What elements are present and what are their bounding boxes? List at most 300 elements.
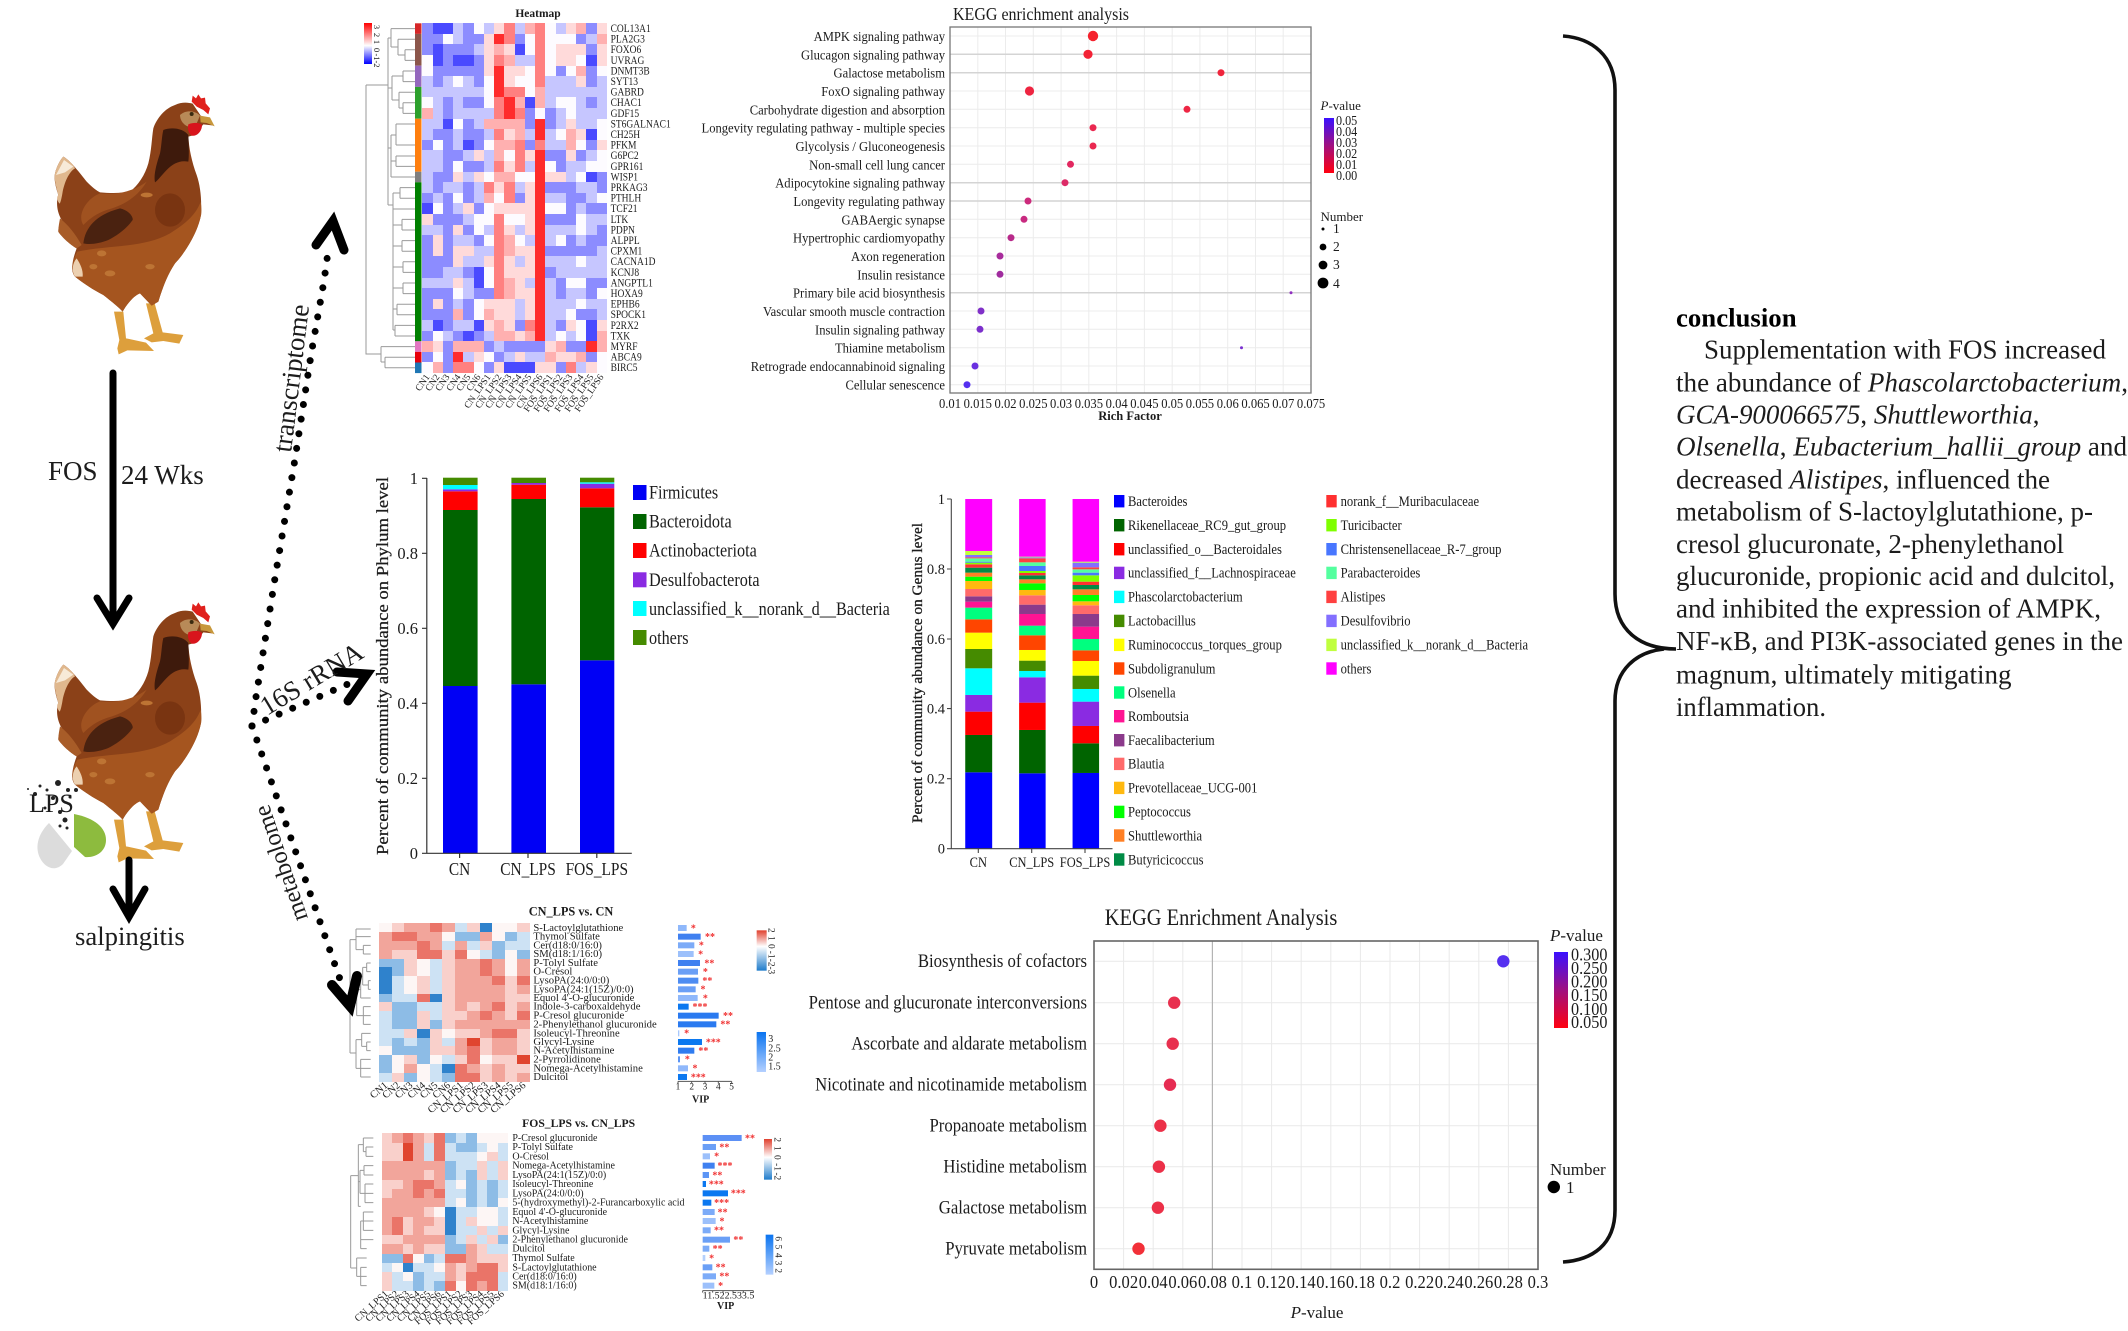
labels: sample names: CN_LPS1 (463, 373, 494, 411)
labels: gene names: ABCA9 (611, 352, 642, 364)
labels: sample names: FOS_LPS5 (563, 373, 597, 414)
labels: sample names: FOS_LPS1 (413, 1289, 454, 1328)
axis title: phylum abundance: Percent of community abundance on Phylum level (373, 477, 392, 855)
labels: metabolite names: Nomega-Acetylhistamine (512, 1161, 615, 1172)
legend: genera column one: unclassified_o__Bacteroidales (1128, 541, 1282, 557)
x axis labels (970, 854, 1110, 870)
x axis labels: CN (970, 854, 987, 870)
heading: KEGG enrichment analysis: KEGG enrichment analysis (953, 4, 1129, 24)
labels: significance stars: ** (714, 1226, 724, 1237)
heading: FOS_LPS vs. CN_LPS: FOS_LPS vs. CN_LPS (522, 1117, 635, 1130)
y axis tick labels: 0.2 (397, 769, 418, 788)
labels: significance stars: ** (702, 976, 712, 987)
labels: metabolite names: SM(d18:1/16:0) (533, 949, 602, 960)
labels: significance stars: * (684, 1029, 689, 1040)
x axis tick labels: 0.02 (995, 395, 1017, 411)
legend: genera column two: Christensenellaceae_R-7_group (1341, 541, 1502, 557)
axis: VIP scale: 11.522.533.5 (703, 1292, 755, 1302)
labels: gene names: GDF15 (611, 108, 639, 120)
chart: enrichment dots (964, 31, 1292, 388)
legend: expression colour scale (364, 23, 382, 68)
paragraph: conclusion body: metabolism of S-lactoylglutathione, p- (1676, 496, 2093, 526)
x axis labels: CN (449, 859, 470, 879)
labels: gene names: BIRC5 (611, 362, 638, 374)
x axis tick labels: 0.08 (1198, 1271, 1227, 1292)
x axis labels: FOS_LPS (566, 859, 628, 879)
legend: P-value colour scale: P-value (1549, 926, 1603, 945)
paragraph: conclusion body: and inhibited the expression of AMPK, (1676, 593, 2101, 623)
legend: phyla: Bacteroidota (649, 512, 732, 532)
labels: significance stars: * (691, 924, 696, 935)
labels: gene names: CH25H (611, 129, 640, 141)
paragraph: conclusion body: Supplementation with FOS increased (1704, 335, 2106, 365)
plot frame (1094, 941, 1538, 1269)
legend: gene number sizes: 1 (1333, 221, 1340, 236)
labels: gene names: SPOCK1 (611, 309, 646, 321)
labels: metabolite names: Isoleucyl-Threonine (512, 1179, 594, 1190)
legend: phyla: others (649, 628, 689, 648)
labels: significance stars: * (685, 1055, 690, 1066)
labels: gene names: CHAC1 (611, 97, 642, 109)
legend: number size: 1 (1566, 1178, 1574, 1197)
labels: significance stars: ** (745, 1134, 755, 1145)
legend: P-value colour scale: 0.05 (1336, 113, 1357, 128)
labels: metabolite names: 2-Phenylethanol glucuronide (533, 1020, 657, 1031)
legend: VIP colour scale: 2 (772, 1269, 782, 1274)
labels: metabolite names: Cer(d18:0/16:0) (512, 1272, 577, 1283)
labels: gene names: KCNJ8 (611, 267, 639, 279)
labels: gene names: LTK (611, 214, 629, 226)
x axis tick labels: 0.14 (1287, 1271, 1316, 1292)
axes (422, 478, 632, 858)
legend: genera column one: Peptococcus (1128, 804, 1191, 820)
labels: pathway names: Carbohydrate digestion and absorption (750, 102, 945, 117)
labels: significance stars: * (700, 985, 705, 996)
arrow: transcriptome branch (252, 221, 344, 726)
labels: sample names: CN_LPS1 (426, 1081, 466, 1116)
panel: KEGG Enrichment Analysis dot plot (metabolome) (809, 905, 1607, 1322)
labels: pathway names: Thiamine metabolism (835, 340, 946, 356)
labels: sample names: FOS_LPS5 (455, 1289, 496, 1328)
labels: significance stars: * (709, 1254, 714, 1265)
legend: P-value colour scale: 0.02 (1336, 146, 1357, 161)
legend: P-value colour scale: 0.200 (1571, 972, 1607, 992)
labels: pathway names: Glucagon signaling pathway (801, 47, 945, 62)
labels: metabolite names: S-Lactoylglutathione (512, 1263, 597, 1274)
legend: expression colour scale: 2 (372, 33, 382, 37)
labels: sample names: FOS_LPS2 (532, 373, 566, 414)
axis title: genus abundance: Percent of community abundance on Genus level (910, 523, 926, 823)
labels: gene names: GPR161 (611, 161, 643, 173)
legend: genera column one: Shuttleworthia (1128, 827, 1202, 844)
labels: metabolic pathway names: Galactose metabolism (939, 1197, 1087, 1218)
labels: metabolite names: Thymol Sulfate (533, 932, 600, 943)
label: LPS: LPS (29, 789, 74, 818)
legend: P-value colour scale: 0.01 (1336, 157, 1357, 172)
legend: number size (1548, 1160, 1606, 1197)
legend: VIP colour scale: 3 (772, 1261, 782, 1266)
labels: significance stars: ** (705, 932, 715, 943)
paragraph: conclusion body (1676, 335, 2128, 722)
x axis tick labels: 0.055 (1186, 395, 1214, 411)
labels: gene names: GABRD (611, 87, 644, 99)
labels: gene names: CACNA1D (611, 256, 656, 268)
plot frame and ticks (950, 27, 1311, 393)
labels: gene names: MYRF (611, 341, 638, 353)
labels: significance stars: ** (713, 1244, 723, 1255)
paragraph: conclusion body: GCA-900066575, Shuttleworthia, (1676, 400, 2040, 430)
labels: pathway names (702, 28, 946, 393)
labels: sample names: CN_LPS1 (353, 1289, 391, 1325)
x axis labels: CN_LPS (1009, 854, 1054, 870)
x axis tick labels: 0.3 (1528, 1271, 1549, 1292)
legend: phyla: Desulfobacterota (649, 570, 760, 590)
labels: metabolic pathway names: Pyruvate metabolism (945, 1238, 1087, 1259)
legend: P-value colour scale: 0.100 (1571, 999, 1607, 1019)
labels: sample names: FOS_LPS3 (542, 373, 576, 414)
legend: expression colour scale: -1 (372, 53, 382, 61)
paragraph: conclusion body: magnum, ultimately mitigating (1676, 660, 2012, 690)
labels: significance stars: *** (691, 1073, 706, 1084)
label: 16S rRNA: 16S rRNA (255, 636, 369, 721)
legend: genera column one: Blautia (1128, 756, 1164, 772)
axis: VIP scale (676, 1082, 734, 1106)
legend: P-value colour scale: 0.250 (1571, 958, 1607, 978)
legend: gene number sizes: 4 (1333, 276, 1340, 291)
heading: KEGG Enrichment Analysis: KEGG Enrichment Analysis (1105, 905, 1337, 930)
labels: metabolite names: 2-Pyrrolidinone (533, 1055, 601, 1066)
labels: metabolite names: S-Lactoylglutathione (533, 923, 624, 934)
labels: pathway names: Insulin signaling pathway (815, 322, 945, 337)
labels: pathway names: Cellular senescence (845, 377, 945, 393)
labels: sample names: CN5 (455, 373, 474, 393)
labels: significance stars: *** (718, 1161, 732, 1172)
labels: gene names: ST6GALNAC1 (611, 119, 671, 131)
labels: significance stars: * (714, 1152, 719, 1163)
labels: metabolite names: 5-(hydroxymethyl)-2-Furancarboxylic acid (512, 1198, 685, 1209)
labels: sample names: CN6 (431, 1081, 453, 1101)
labels: gene names: UVRAG (611, 55, 645, 67)
labels: pathway names: Hypertrophic cardiomyopathy (793, 230, 945, 246)
labels: sample names: CN3 (393, 1081, 415, 1101)
x axis tick labels: 0.065 (1241, 395, 1270, 411)
legend: genera column one: Subdoligranulum (1128, 660, 1216, 677)
labels: sample names: CN2 (381, 1081, 403, 1101)
labels: significance stars: * (718, 1281, 723, 1292)
labels: significance stars (684, 924, 733, 1084)
labels: metabolic pathway names: Biosynthesis of cofactors (918, 950, 1087, 971)
panel: genus-level stacked bar chart (910, 492, 1528, 870)
labels: sample names: FOS_LPS6 (465, 1289, 507, 1328)
labels: sample names: CN_LPS2 (438, 1081, 478, 1116)
labels: metabolite names: P-Tolyl Sulfate (512, 1142, 573, 1153)
labels: metabolite names: Isoleucyl-Threonine (533, 1029, 620, 1040)
legend: genera column one: Butyricicoccus (1128, 851, 1204, 868)
arrow: 16S rRNA branch (252, 672, 367, 726)
axis: VIP scale: 3 (703, 1083, 708, 1093)
labels: metabolite names: Cer(d18:0/16:0) (533, 941, 602, 952)
paragraph: conclusion body: decreased Alistipes, influenced the (1676, 464, 2050, 494)
labels: metabolite names: Dulcitol (512, 1244, 545, 1255)
labels: pathway names: AMPK signaling pathway (814, 28, 945, 44)
labels: metabolite names: Thymol Sulfate (512, 1253, 575, 1264)
labels: metabolite names: P-Cresol glucuronide (533, 1011, 624, 1022)
labels: gene names: FOXO6 (611, 44, 641, 56)
labels: metabolite names: N-Acetylhistamine (533, 1046, 615, 1057)
legend: VIP colour scale (766, 1235, 782, 1275)
legend: genera column one: Olsenella (1128, 684, 1176, 701)
labels: gene names: WISP1 (611, 172, 638, 184)
chart: gene dendrogram (366, 29, 415, 368)
icon: hen on FOS diet (55, 94, 215, 354)
y axis tick labels: 0.2 (927, 772, 945, 788)
x axis tick labels (1090, 1271, 1549, 1292)
labels: sample names (353, 1289, 507, 1328)
legend: abundance colour scale (757, 928, 775, 975)
labels: sample names: FOS_LPS6 (573, 373, 607, 414)
chart: metabolite dendrogram (351, 1138, 373, 1286)
labels: gene names: PDPN (611, 225, 635, 237)
labels: sample names: CN_LPS6 (489, 1081, 528, 1116)
labels: significance stars (709, 1134, 755, 1292)
panel: KEGG enrichment analysis dot plot (transcriptome) (702, 4, 1364, 423)
x axis tick labels: 0.015 (964, 395, 992, 411)
panel: hens, FOS treatment and LPS challenge flow (27, 94, 215, 951)
x axis tick labels: 0.1 (1232, 1271, 1252, 1292)
legend: phyla: Firmicutes (649, 483, 718, 503)
legend: P-value colour scale: 0.300 (1571, 945, 1607, 965)
labels: sample names: CN_LPS6 (405, 1289, 443, 1325)
legend: genera column one: Phascolarctobacterium (1128, 589, 1243, 605)
legend: genera column one: Ruminococcus_torques_group (1128, 637, 1282, 653)
chart: VIP bars (678, 925, 719, 1080)
legend: genera column two: Turicibacter (1341, 517, 1402, 533)
y axis tick labels: 0.4 (927, 702, 946, 718)
legend: abundance colour scale: -3 (765, 967, 775, 975)
labels: pathway names: Glycolysis / Gluconeogenesis (795, 138, 945, 154)
legend: abundance colour scale: -2 (765, 959, 775, 967)
labels: gene names: ANGPTL1 (611, 278, 653, 290)
labels: gene names: SYT13 (611, 76, 638, 88)
labels: gene names: CPXM1 (611, 246, 642, 258)
labels: sample names: CN_LPS2 (363, 1289, 401, 1325)
axis: VIP scale: 5 (729, 1083, 734, 1093)
x axis tick labels: 0.12 (1257, 1271, 1286, 1292)
legend: genera column two: Alistipes (1341, 589, 1385, 605)
labels: sample names: CN_LPS6 (515, 373, 546, 411)
label: transcriptome: transcriptome (267, 303, 315, 454)
labels: metabolite names: Equol 4'-O-glucuronide (512, 1207, 608, 1218)
labels: significance stars: ** (718, 1208, 728, 1219)
labels: metabolite names: N-Acetylhistamine (512, 1216, 589, 1227)
labels: sample names: CN5 (418, 1081, 440, 1101)
icon: curly brace linking results to conclusion (1562, 34, 1676, 1264)
labels: sample names: CN1 (414, 373, 433, 393)
labels: sample names: FOS_LPS4 (444, 1289, 486, 1328)
labels: sample names: CN_LPS4 (494, 373, 525, 411)
labels: metabolite names: 2-Phenylethanol glucuronide (512, 1235, 629, 1246)
labels: significance stars: * (719, 1217, 724, 1228)
arrow: FOS for 24 weeks (97, 373, 129, 624)
labels: gene names: TCF21 (611, 203, 638, 215)
labels: pathway names: Non-small cell lung cancer (809, 157, 946, 172)
labels: significance stars: * (699, 941, 704, 952)
paragraph: conclusion body: glucuronide, propionic acid and dulcitol, (1676, 561, 2115, 591)
labels: metabolic pathway names: Histidine metabolism (943, 1156, 1087, 1177)
legend: gene number sizes: Number (1320, 209, 1364, 224)
legend: abundance colour scale: -1 (765, 951, 775, 959)
labels: sample names: FOS_LPS1 (522, 373, 556, 414)
labels: sample names: CN_LPS3 (484, 373, 515, 411)
legend: P-value colour scale: 0.00 (1336, 168, 1357, 183)
labels: gene names: PFKM (611, 140, 637, 152)
x axis tick labels: 0.16 (1316, 1271, 1346, 1292)
labels: pathway names: Primary bile acid biosynthesis (793, 285, 945, 301)
legend: P-value colour scale (1549, 926, 1607, 1032)
legend: VIP colour scale: 6 (772, 1237, 782, 1242)
legend: P-value colour scale: P-value (1320, 98, 1361, 113)
labels: metabolite names: P-Tolyl Sulfate (533, 958, 598, 969)
labels: sample names: CN_LPS2 (474, 373, 505, 411)
x axis tick labels: 0.04 (1106, 395, 1128, 411)
legend: genera column one: Bacteroides (1128, 493, 1187, 509)
legend: P-value colour scale: 0.050 (1571, 1012, 1607, 1032)
x axis tick labels: 0.22 (1405, 1271, 1434, 1292)
chart: VIP bars (703, 1135, 742, 1289)
labels: significance stars: ** (723, 1011, 733, 1022)
labels: significance stars: *** (706, 1038, 721, 1049)
bars: CN, CN_LPS and FOS_LPS genus composition (965, 499, 1099, 849)
labels: significance stars: ** (716, 1263, 726, 1274)
labels: metabolic pathway names: Ascorbate and aldarate metabolism (851, 1033, 1087, 1054)
labels: significance stars: ** (720, 1020, 730, 1031)
labels: sample names: CN_LPS4 (464, 1081, 503, 1116)
x axis title: Rich Factor: Rich Factor (1098, 409, 1162, 423)
legend: expression colour scale: -2 (372, 60, 382, 68)
heading: Heatmap: Heatmap (515, 8, 561, 20)
chart: metabolite dendrogram (350, 929, 371, 1077)
labels: metabolic pathway names: Pentose and glucuronate interconversions (809, 992, 1087, 1013)
labels: metabolite names: LysoPA(24:0/0:0) (533, 976, 610, 987)
axis: VIP scale: 2 (689, 1083, 694, 1093)
labels: pathway names: Retrograde endocannabinoid signaling (751, 358, 945, 374)
legend: genera column one: Faecalibacterium (1128, 732, 1215, 748)
labels: pathway names: Axon regeneration (851, 248, 945, 264)
labels: significance stars: ** (719, 1143, 729, 1154)
x axis tick labels: 0 (1090, 1271, 1098, 1292)
panel: phylum-level stacked bar chart (373, 469, 890, 879)
y axis tick labels: 0.6 (397, 619, 418, 638)
legend: expression colour scale: 1 (372, 40, 382, 44)
x axis title: P-value: P-value (1290, 1303, 1343, 1322)
arrow: to salpingitis (113, 860, 145, 917)
x axis tick labels: 0.07 (1272, 395, 1295, 411)
legend: genera column one: unclassified_f__Lachnospiraceae (1128, 565, 1296, 581)
labels: sample names: CN6 (465, 373, 484, 393)
legend: abundance colour scale (764, 1138, 781, 1181)
x axis tick labels: 0.06 (1168, 1271, 1198, 1292)
paragraph: conclusion body: cresol glucuronate, 2-phenylethanol (1676, 529, 2064, 559)
labels: metabolite names: Indole-3-carboxaldehyde (533, 1002, 641, 1013)
legend: abundance colour scale: 2 (771, 1138, 781, 1143)
labels: gene names: PRKAG3 (611, 182, 648, 194)
labels: significance stars: * (703, 994, 708, 1005)
y axis tick labels: 1 (410, 469, 418, 488)
labels: metabolite names: Nomega-Acetylhistamine (533, 1064, 643, 1075)
x axis tick labels: 0.03 (1050, 395, 1072, 411)
labels: sample names: CN4 (445, 373, 464, 393)
labels: metabolic pathway names (809, 950, 1087, 1259)
x axis tick labels: 0.24 (1435, 1271, 1464, 1292)
label: metabolome: metabolome (249, 801, 314, 925)
legend: genera column one: Rikenellaceae_RC9_gut_group (1128, 517, 1286, 533)
y axis tick labels (397, 469, 418, 863)
labels: gene names: P2RX2 (611, 320, 639, 332)
legend: genera column one: Lactobacillus (1128, 613, 1196, 629)
legend: P-value colour scale (1320, 98, 1361, 183)
labels: gene names: DNMT3B (611, 66, 650, 78)
x axis tick labels: 0.2 (1380, 1271, 1400, 1292)
x axis tick labels: 0.04 (1139, 1271, 1168, 1292)
legend: VIP colour scale: 2.5 (768, 1044, 781, 1055)
paragraph: conclusion body: the abundance of Phascolarctobacterium, (1676, 367, 2128, 397)
legend: genera column one: Prevotellaceae_UCG-001 (1128, 780, 1257, 796)
legend: abundance colour scale: -1 (771, 1163, 781, 1172)
panel: metabolome heatmap CN_LPS vs. CN (350, 905, 781, 1116)
chart: differential metabolite heatmap cells (379, 923, 530, 1082)
labels: sample names: CN_LPS5 (504, 373, 535, 411)
labels: sample names: CN_LPS3 (374, 1289, 412, 1325)
legend: phyla: unclassified_k__norank_d__Bacteria (649, 599, 890, 619)
legend: abundance colour scale: 1 (771, 1146, 781, 1151)
labels: significance stars: ** (704, 959, 714, 970)
labels: significance stars: ** (712, 1171, 722, 1182)
labels: pathway names: FoxO signaling pathway (821, 83, 945, 99)
labels: significance stars: ** (698, 1046, 708, 1057)
legend: abundance colour scale: -2 (771, 1173, 781, 1181)
labels: metabolic pathway names: Propanoate metabolism (929, 1115, 1087, 1136)
legend: genera column two: Parabacteroides (1341, 565, 1420, 581)
labels: sample names (414, 373, 607, 414)
labels: gene names: COL13A1 (611, 23, 651, 35)
labels: gene names: TXK (611, 331, 630, 343)
axis: VIP scale: VIP (692, 1095, 709, 1106)
legend: genera column one: Romboutsia (1128, 708, 1189, 724)
labels: sample names (368, 1081, 528, 1116)
labels: gene names: G6PC2 (611, 150, 639, 162)
paragraph: conclusion body: inflammation. (1676, 692, 1826, 722)
legend: abundance colour scale: 0 (765, 944, 775, 949)
labels: metabolite names: SM(d18:1/16:0) (512, 1281, 577, 1292)
labels: sample names: CN3 (434, 373, 453, 393)
y axis tick labels (927, 492, 946, 858)
legend: number size: Number (1550, 1160, 1606, 1179)
x axis tick labels: 0.01 (939, 395, 961, 411)
labels: sample names: CN1 (368, 1081, 390, 1101)
arrow: metabolome branch (252, 726, 357, 1006)
labels: metabolite names (533, 923, 657, 1083)
labels: metabolite names (512, 1133, 685, 1292)
y axis tick labels: 0.8 (397, 544, 418, 563)
labels: metabolite names: LysoPA(24:1(15Z)/0:0) (533, 985, 634, 996)
legend: gene number sizes (1318, 209, 1364, 291)
legend: abundance colour scale: 1 (765, 936, 775, 941)
axis: VIP scale: VIP (717, 1301, 734, 1312)
legend: abundance colour scale: 2 (765, 928, 775, 933)
labels: sample names: FOS_LPS2 (423, 1289, 465, 1328)
labels: sample names: CN4 (406, 1081, 428, 1101)
x axis tick labels: 0.045 (1130, 395, 1159, 411)
